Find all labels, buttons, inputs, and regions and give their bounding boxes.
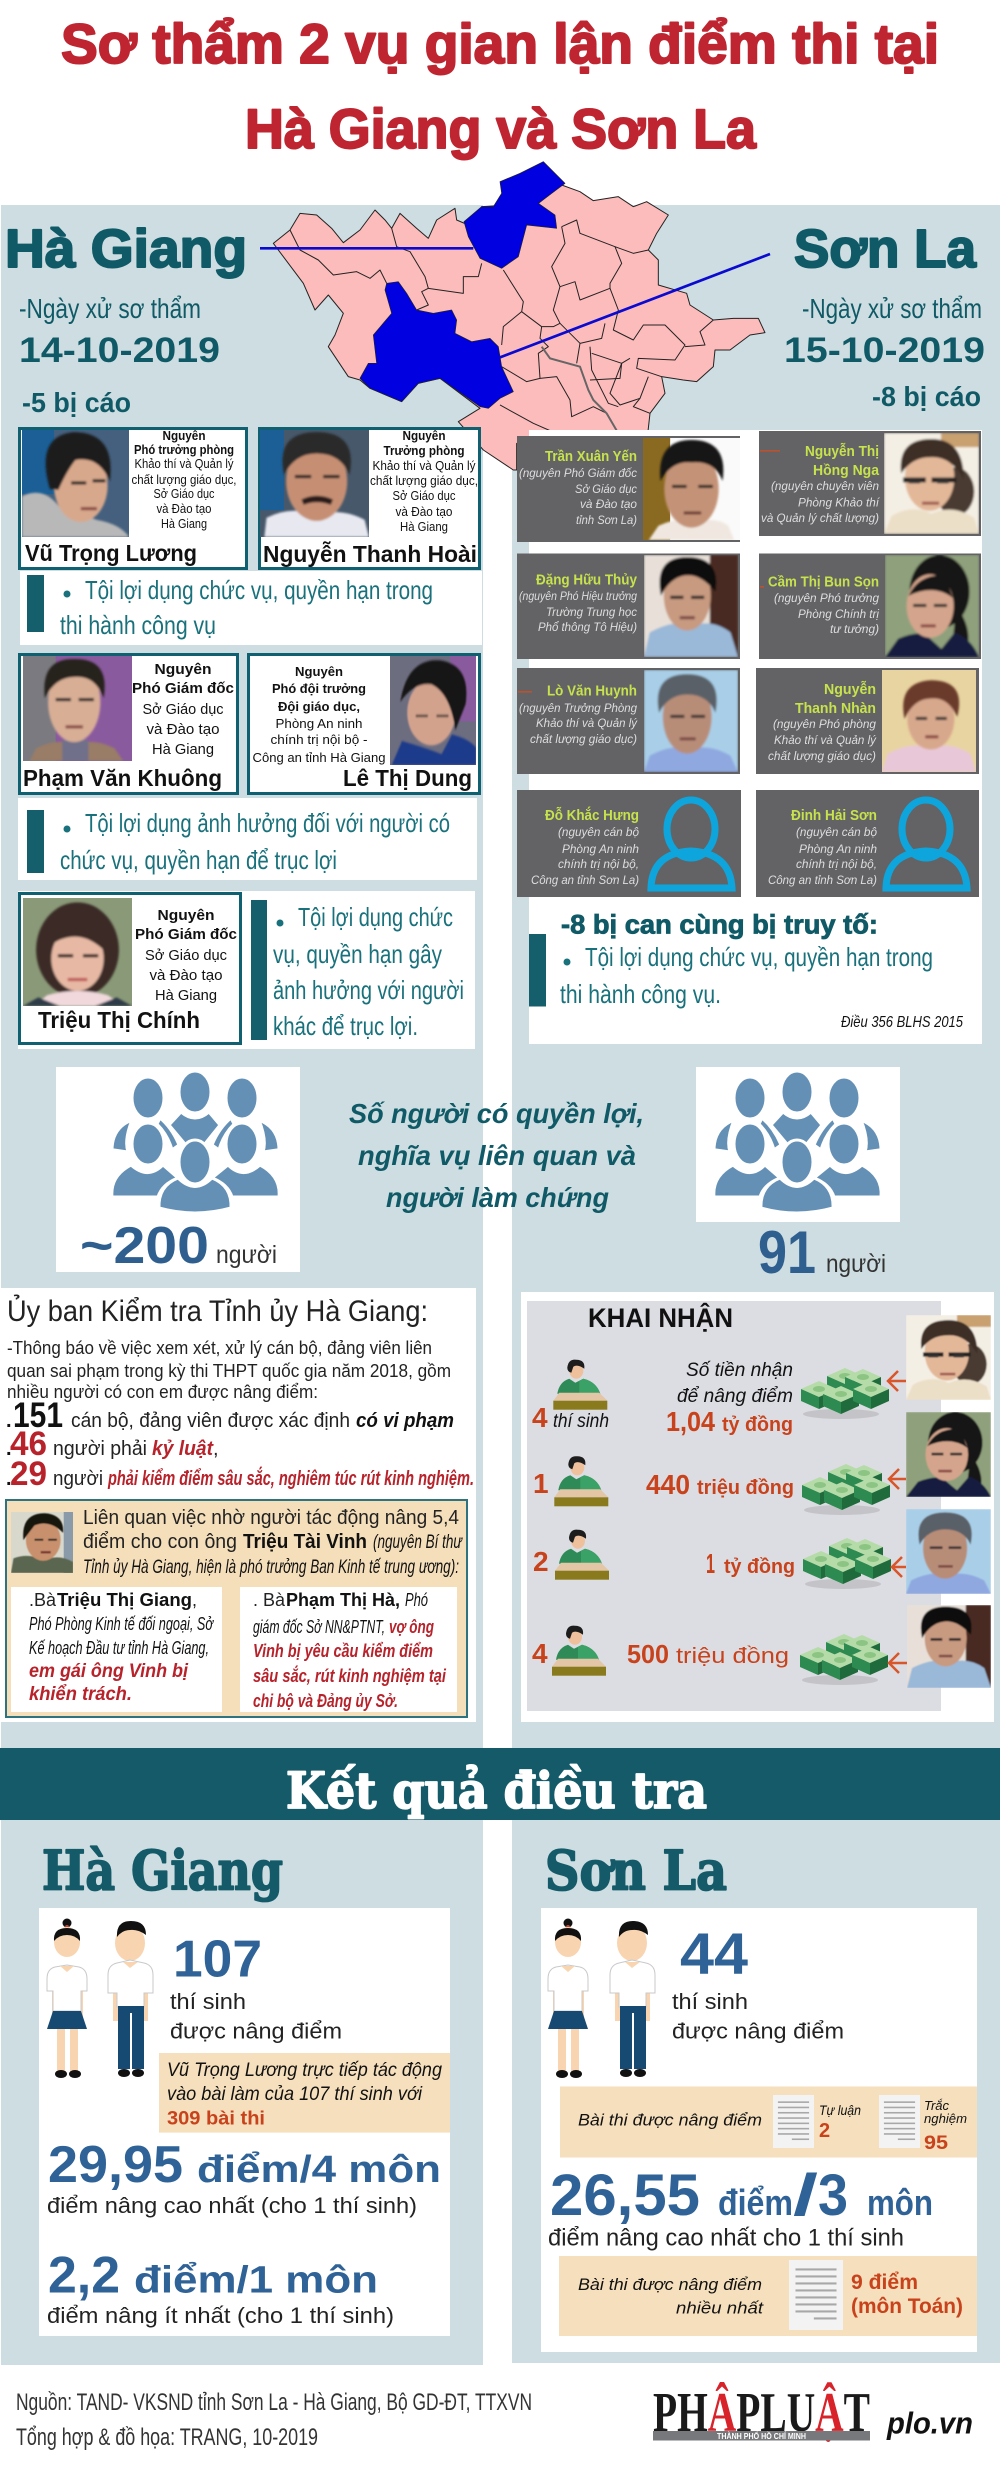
card: Trần Xuân Yến xyxy=(517,436,740,542)
logo: Pháp Luật TP.HCM and plo.vn: plo.vn xyxy=(886,2406,973,2440)
arrows from defendants to money xyxy=(888,1371,907,1673)
card: Đặng Hữu Thủy: (nguyên Phó Hiệu trưởng xyxy=(519,589,637,603)
card: Đặng Hữu Thủy: Trường Trung học xyxy=(546,605,637,619)
card: Nguyễn Thị Hồng Nga: Nguyễn Thị xyxy=(805,443,879,460)
stat: highest score increase: 3 xyxy=(818,2163,848,2228)
icon: group of people xyxy=(714,1071,881,1213)
photo: Trần Xuân Yến xyxy=(643,438,740,540)
card: Vũ Trọng Lương: Hà Giang xyxy=(161,517,207,531)
text block: charge against the 8 Sơn La defendants xyxy=(529,910,963,1031)
photo: Vũ Trọng Lương xyxy=(22,430,129,537)
text block: charge against the 8 Sơn La defendants: Điều 356 BLHS 2015 xyxy=(841,1014,963,1031)
card: Nguyễn Thanh Hoài xyxy=(260,428,480,568)
stat: 151 officials: cán bộ, đảng viên được xác định xyxy=(71,1410,350,1432)
heading: people with related rights and witnesses: người làm chứng xyxy=(386,1182,609,1213)
stat: highest score increase: môn xyxy=(867,2182,933,2223)
card: Nguyễn Thanh Nhàn: Thanh Nhàn xyxy=(795,701,876,717)
photo: Cầm Thị Bun Sọn xyxy=(906,1412,991,1497)
stat: lowest score increase xyxy=(47,2246,394,2328)
heading: Hà Giang, trial date and defendants: -5 bị cáo xyxy=(22,387,131,418)
stat: highest score increase: điểm nâng cao nhất (cho 1 thí sinh) xyxy=(47,2193,417,2218)
callout: upgraded papers: 95 xyxy=(924,2133,948,2154)
card: Triệu Thị Chính: Sở Giáo dục xyxy=(145,947,227,964)
card: Triệu Thị Chính: Nguyên xyxy=(158,907,214,924)
card: Lê Thị Dung: Đội giáo dục, xyxy=(278,699,360,714)
heading: Hà Giang, trial date and defendants: 14-10-2019 xyxy=(19,331,220,370)
card: Đặng Hữu Thủy: Phổ thông Tô Hiệu) xyxy=(538,620,637,634)
stat: 46 people disciplined: kỷ luật xyxy=(152,1438,214,1460)
heading: people with related rights and witnesses: Số người có quyền lợi, xyxy=(349,1098,644,1129)
text box: Triệu Thị Giang: Triệu Thị Giang xyxy=(57,1590,192,1610)
card: Triệu Thị Chính: Triệu Thị Chính xyxy=(38,1007,200,1033)
stat: about 200 people in Hà Giang xyxy=(56,1067,300,1275)
card: Lê Thị Dung: Công an tỉnh Hà Giang xyxy=(252,750,386,765)
stat: highest score increase xyxy=(548,2163,933,2252)
card: Đỗ Khắc Hưng: chính trị nội bộ, xyxy=(558,857,639,871)
card: Nguyễn Thanh Hoài: Nguyễn Thanh Hoài xyxy=(263,540,477,567)
text box: Phạm Thị Hà: chi bộ và Đảng ủy Sở. xyxy=(253,1691,398,1711)
logo: Pháp Luật TP.HCM and plo.vn: THÀNH PHỐ HỒ CHÍ MINH xyxy=(717,2431,806,2441)
card: Nguyễn Thanh Nhàn: Khảo thí và Quản lý xyxy=(774,733,877,747)
stat: lowest score increase: 2,2 xyxy=(48,2246,120,2304)
panel: Sơn La results: thí sinh xyxy=(672,1989,748,2014)
card: Phạm Văn Khuông: Nguyên xyxy=(154,661,212,678)
stat: 46 people disciplined: . xyxy=(6,1438,12,1460)
stat: highest score increase: 29,95 xyxy=(48,2136,183,2194)
callout: upgraded papers: Bài thi được nâng điểm xyxy=(578,2110,762,2130)
row: 2 students, 1 billion: 1 xyxy=(706,1548,715,1579)
card: Đinh Hải Sơn: Công an tỉnh Sơn La) xyxy=(768,873,877,887)
photo: Cầm Thị Bun Sọn xyxy=(885,555,979,657)
stat: 46 people disciplined: , xyxy=(213,1438,219,1460)
leader line: Sơn La xyxy=(500,254,770,357)
photo: Nguyễn Thị Hồng Nga xyxy=(884,433,979,534)
row: 2 students, 1 billion: tỷ đồng xyxy=(724,1556,795,1578)
text block: charge against the 8 Sơn La defendants: thi hành công vụ. xyxy=(560,979,721,1009)
card: Nguyễn Thanh Hoài: Trưởng phòng xyxy=(384,444,464,458)
heading: people with related rights and witnesses: nghĩa vụ liên quan và xyxy=(358,1140,636,1171)
heading: people with related rights and witnesses xyxy=(349,1098,644,1213)
panel: Ủy ban Kiểm tra Tỉnh ủy Hà Giang: quan sai phạm trong kỳ thi THPT quốc gia năm 2018, gồm xyxy=(7,1361,451,1381)
text box: Phạm Thị Hà: Vinh bị yêu cầu kiểm điểm xyxy=(253,1641,433,1661)
text block: charge 3 xyxy=(18,891,475,1049)
row: 4 students, 1.04 billion: 1,04 xyxy=(666,1406,715,1437)
text block: charge against the 8 Sơn La defendants: -8 bị can cùng bị truy tố: xyxy=(561,910,878,940)
photo: Lê Thị Dung xyxy=(390,656,476,765)
photo: Nguyễn Thị Hồng Nga xyxy=(906,1315,991,1400)
heading: Hà Giang, trial date and defendants xyxy=(5,219,247,418)
province: Hà Giang highlighted xyxy=(464,162,565,268)
panel: Hà Giang results: Hà Giang xyxy=(42,1838,283,1902)
card: Lò Văn Huynh: (nguyên Trưởng Phòng xyxy=(519,701,637,715)
card: Nguyễn Thanh Hoài: chất lượng giáo dục, xyxy=(370,474,478,488)
text block: charge 1 xyxy=(20,571,482,645)
card: Nguyễn Thanh Nhàn: chất lượng giáo dục) xyxy=(768,749,876,763)
icon: document xyxy=(789,2260,843,2330)
photo: Đặng Hữu Thủy xyxy=(907,1605,991,1688)
card: Vũ Trọng Lương: Nguyên xyxy=(162,429,206,443)
panel: Hà Giang results: 107 xyxy=(173,1930,262,1988)
stat: highest score increase: điểm nâng cao nhất cho 1 thí sinh xyxy=(548,2224,904,2252)
card: Phạm Văn Khuông: Phạm Văn Khuông xyxy=(23,765,222,791)
icon: person placeholder xyxy=(886,800,967,888)
stat: 46 people disciplined: 46 xyxy=(10,1425,47,1463)
card: Cầm Thị Bun Sọn: tư tưởng) xyxy=(830,622,879,636)
card: Nguyễn Thị Hồng Nga xyxy=(759,431,981,536)
card: Phạm Văn Khuông: Hà Giang xyxy=(152,741,214,758)
photo: Triệu Thị Chính xyxy=(23,898,132,1006)
card: Vũ Trọng Lương: chất lượng giáo dục, xyxy=(132,473,236,487)
stat: 151 officials: có vi phạm xyxy=(356,1410,454,1432)
source credits: Nguồn: TAND- VKSND tỉnh Sơn La - Hà Giang, Bộ GD-ĐT, TTXVN xyxy=(16,2389,532,2416)
card: Nguyễn Thị Hồng Nga: và Quản lý chất lượng) xyxy=(761,511,879,525)
card: Đinh Hải Sơn: Đinh Hải Sơn xyxy=(791,808,877,824)
panel: Hà Giang results xyxy=(39,1838,450,2336)
callout: most upgraded paper xyxy=(559,2256,977,2336)
photo: Nguyễn Thanh Nhàn xyxy=(882,670,976,772)
stat: 29 people self-critique: 29 xyxy=(10,1455,47,1493)
card: Đặng Hữu Thủy: Đặng Hữu Thủy xyxy=(536,572,637,588)
text box: Phạm Thị Hà: vợ ông xyxy=(389,1617,434,1637)
card: Lò Văn Huynh: Lò Văn Huynh xyxy=(547,684,637,700)
row: 1 student, 440 million: triệu đồng xyxy=(697,1477,794,1499)
card: Vũ Trọng Lương: và Đào tạo xyxy=(156,502,212,516)
text block: charge 2: Tội lợi dụng ảnh hưởng đối với người có xyxy=(85,808,450,838)
card: Nguyễn Thanh Nhàn: Nguyễn xyxy=(824,681,876,698)
source credits xyxy=(16,2389,532,2451)
panel: Hà Giang results: thí sinh xyxy=(170,1989,246,2014)
text block: charge 2: chức vụ, quyền hạn để trục lợi xyxy=(60,845,337,875)
callout: most upgraded paper: 9 điểm xyxy=(851,2271,918,2294)
callout: Triệu Tài Vinh: điểm cho con ông xyxy=(83,1531,237,1553)
panel: Khai nhận (confessions) xyxy=(521,1292,994,1722)
icon: group of people xyxy=(112,1071,279,1213)
card: Lê Thị Dung: Phòng An ninh xyxy=(276,716,362,731)
logo: Pháp Luật TP.HCM and plo.vn: PHÂPLUẬT xyxy=(653,2381,870,2444)
callout: Triệu Tài Vinh: Tỉnh ủy Hà Giang, hiện là phó trưởng Ban Kinh tế trung ương): xyxy=(83,1557,459,1578)
source credits: Tổng hợp & đồ họa: TRANG, 10-2019 xyxy=(16,2424,318,2451)
callout: most upgraded paper: (môn Toán) xyxy=(851,2295,963,2318)
text box: Triệu Thị Giang: khiển trách. xyxy=(29,1684,132,1705)
text block: charge 1: thi hành công vụ xyxy=(60,610,216,640)
text box: Phạm Thị Hà: sâu sắc, rút kinh nghiệm tại xyxy=(253,1665,447,1686)
row: 4 students, 1.04 billion: thí sinh xyxy=(553,1411,609,1432)
callout: upgraded papers: nghiệm xyxy=(924,2111,967,2126)
stat: 46 people disciplined xyxy=(6,1425,219,1463)
text box: Triệu Thị Giang: Kế hoạch Đầu tư tỉnh Hà Giang, xyxy=(29,1638,209,1658)
text box: Phạm Thị Hà: giám đốc Sở NN&PTNT, xyxy=(253,1617,385,1637)
card: Nguyễn Thị Hồng Nga: Hồng Nga xyxy=(813,463,880,479)
card: Lê Thị Dung: chính trị nội bộ - xyxy=(270,732,368,747)
text block: charge 3: ảnh hưởng với người xyxy=(273,975,464,1005)
text box: Triệu Thị Giang: , xyxy=(192,1590,197,1610)
card: Trần Xuân Yến: Sở Giáo dục xyxy=(575,482,637,496)
callout: upgraded papers: Trắc xyxy=(924,2098,950,2113)
card: Lò Văn Huynh: Khảo thí và Quản lý xyxy=(536,716,638,730)
row: 1 student, 440 million: 440 xyxy=(646,1469,690,1500)
card: Cầm Thị Bun Sọn xyxy=(759,554,981,659)
card: Lò Văn Huynh xyxy=(517,668,740,774)
stat: 151 officials xyxy=(6,1396,454,1435)
row: 4 students, 1.04 billion: 4 xyxy=(532,1402,548,1433)
text block: charge 3: Tội lợi dụng chức xyxy=(298,902,453,932)
stat: about 200 people in Hà Giang: ~200 xyxy=(80,1217,209,1275)
card: Lê Thị Dung: Lê Thị Dung xyxy=(343,765,472,791)
row: 4 students, 500 million: 4 xyxy=(532,1638,548,1669)
callout: 309 papers: vào bài làm của 107 thí sinh với xyxy=(167,2084,423,2105)
stat: 91 people in Sơn La: 91 xyxy=(758,1219,816,1286)
panel: Ủy ban Kiểm tra Tỉnh ủy Hà Giang: Ủy ban Kiểm tra Tỉnh ủy Hà Giang: xyxy=(7,1294,428,1328)
icon: girl student xyxy=(47,1918,87,2078)
photo: Triệu Tài Vinh xyxy=(11,1512,73,1573)
panel: Khai nhận (confessions): KHAI NHẬN xyxy=(588,1302,733,1333)
title xyxy=(61,12,939,160)
province: Sơn La highlighted xyxy=(360,282,513,408)
panel: Hà Giang results background xyxy=(1,1820,483,2365)
card: Phạm Văn Khuông: và Đào tạo xyxy=(146,721,220,738)
text box: Triệu Thị Giang: em gái ông Vinh bị xyxy=(29,1661,189,1682)
card: Nguyễn Thanh Hoài: và Đào tạo xyxy=(396,505,453,519)
card: Phạm Văn Khuông: Phó Giám đốc xyxy=(132,680,234,697)
row: 4 students, 1.04 billion: để nâng điểm xyxy=(677,1386,793,1407)
stat: highest score increase: 26,55 xyxy=(550,2163,700,2228)
card: Đinh Hải Sơn: chính trị nội bộ, xyxy=(796,857,877,871)
card: Vũ Trọng Lương xyxy=(20,428,246,568)
text box: Triệu Thị Giang: .Bà xyxy=(29,1590,57,1610)
card: Đỗ Khắc Hưng: Đỗ Khắc Hưng xyxy=(545,806,639,824)
callout: 309 papers xyxy=(159,2053,450,2133)
icon: girl student xyxy=(548,1918,588,2078)
panel: Ủy ban Kiểm tra Tỉnh ủy Hà Giang: -Thông báo về việc xem xét, xử lý cán bộ, đảng viên liên xyxy=(7,1338,432,1358)
title: Hà Giang và Sơn La xyxy=(245,97,757,160)
text box: Phạm Thị Hà: Phó xyxy=(405,1590,428,1610)
card: Đỗ Khắc Hưng xyxy=(517,790,741,897)
text block: charge 3: khác để trục lợi. xyxy=(273,1011,418,1041)
stat: 29 people self-critique: . xyxy=(6,1468,12,1490)
card: Nguyễn Thị Hồng Nga: (nguyên chuyên viên xyxy=(771,479,879,493)
text box: Triệu Thị Giang xyxy=(11,1587,222,1712)
card: Phạm Văn Khuông xyxy=(20,654,238,794)
stat: highest score increase: / xyxy=(793,2163,818,2228)
heading: Sơn La, trial date and defendants xyxy=(784,219,985,412)
callout: Triệu Tài Vinh xyxy=(6,1500,467,1717)
text box: Triệu Thị Giang: Phó Phòng Kinh tế đối ngoại, Sở xyxy=(29,1614,214,1634)
card: Nguyễn Thanh Hoài: Hà Giang xyxy=(400,520,448,534)
card: Trần Xuân Yến: tỉnh Sơn La) xyxy=(576,513,637,527)
card: Cầm Thị Bun Sọn: (nguyên Phó trưởng xyxy=(774,591,879,605)
callout: upgraded papers: Tự luận xyxy=(819,2102,861,2118)
row: 1 student, 440 million xyxy=(533,1456,890,1515)
text block: charge 3: vụ, quyền hạn gây xyxy=(273,939,442,969)
card: Đinh Hải Sơn xyxy=(756,790,979,897)
row: 4 students, 500 million: 500 xyxy=(627,1639,669,1669)
row: 4 students, 500 million xyxy=(532,1626,888,1685)
stat: 29 people self-critique: phải kiểm điểm sâu sắc, nghiêm túc rút kinh nghiệm. xyxy=(107,1467,474,1490)
panel: Ủy ban Kiểm tra Tỉnh ủy Hà Giang: nhiều người có con em được nâng điểm: xyxy=(7,1382,318,1402)
title: Sơ thẩm 2 vụ gian lận điểm thi tại xyxy=(61,12,939,75)
callout: upgraded papers: 2 xyxy=(819,2120,830,2142)
card: Triệu Thị Chính: Phó Giám đốc xyxy=(135,926,237,943)
stat: lowest score increase: điểm/1 môn xyxy=(134,2260,378,2302)
card: Nguyễn Thanh Nhàn xyxy=(756,668,979,774)
card: Vũ Trọng Lương: Khảo thí và Quản lý xyxy=(134,457,234,471)
photo: Lò Văn Huynh xyxy=(644,670,738,772)
heading: Sơn La, trial date and defendants: Sơn La xyxy=(794,219,977,279)
heading: Hà Giang, trial date and defendants: Hà Giang xyxy=(5,219,247,279)
card: Đinh Hải Sơn: (nguyên cán bộ xyxy=(796,825,877,839)
panel: Sơn La defendants white backing xyxy=(529,430,982,1044)
card: Trần Xuân Yến: và Đào tạo xyxy=(580,497,637,511)
text block: charge 1: Tội lợi dụng chức vụ, quyền hạn trong xyxy=(85,575,433,605)
heading: Sơn La, trial date and defendants: -8 bị cáo xyxy=(872,381,981,412)
row: 4 students, 1.04 billion: tỷ đồng xyxy=(722,1414,793,1436)
stat: highest score increase: điểm/4 môn xyxy=(197,2149,441,2191)
stat: 91 people in Sơn La xyxy=(696,1067,900,1286)
stat: highest score increase xyxy=(47,2136,441,2218)
card: Lê Thị Dung xyxy=(248,654,480,794)
card: Lê Thị Dung: Phó đội trưởng xyxy=(272,681,366,696)
heading: Hà Giang, trial date and defendants: -Ngày xử sơ thẩm xyxy=(19,293,201,324)
card: Lò Văn Huynh: chất lượng giáo dục) xyxy=(530,732,637,746)
panel: Sơn La results xyxy=(541,1838,977,2352)
card: Đỗ Khắc Hưng: (nguyên cán bộ xyxy=(558,825,639,839)
callout: most upgraded paper: Bài thi được nâng điểm xyxy=(578,2275,762,2294)
stat: 29 people self-critique xyxy=(6,1455,474,1493)
card: Đinh Hải Sơn: Phòng An ninh xyxy=(799,842,877,856)
section banner: Kết quả điều tra: Kết quả điều tra xyxy=(286,1761,707,1820)
stat: 29 people self-critique: người xyxy=(53,1468,103,1490)
card: Nguyễn Thanh Hoài: Nguyên xyxy=(402,429,446,443)
panel: Hà Giang background xyxy=(1,205,483,1748)
stat: about 200 people in Hà Giang: người xyxy=(216,1241,277,1269)
row: 2 students, 1 billion xyxy=(533,1530,891,1589)
photo: Lò Văn Huynh xyxy=(906,1509,991,1594)
callout: Triệu Tài Vinh: Triệu Tài Vinh xyxy=(243,1531,367,1553)
callout: 309 papers: 309 bài thi xyxy=(167,2109,265,2130)
card: Vũ Trọng Lương: Phó trưởng phòng xyxy=(134,443,234,457)
photo: Phạm Văn Khuông xyxy=(23,656,132,761)
stat: 46 people disciplined: người phải xyxy=(53,1438,147,1460)
card: Triệu Thị Chính: Hà Giang xyxy=(155,987,217,1004)
text box: Phạm Thị Hà: Phạm Thị Hà, xyxy=(286,1590,400,1610)
row: 2 students, 1 billion: 2 xyxy=(533,1546,549,1577)
stat: 151 officials: . xyxy=(6,1410,12,1432)
section banner: Kết quả điều tra xyxy=(0,1748,1000,1820)
card: Đỗ Khắc Hưng: Công an tỉnh Sơn La) xyxy=(531,873,639,887)
panel: Ủy ban Kiểm tra Tỉnh ủy Hà Giang xyxy=(1,1288,476,1722)
card: Nguyễn Thanh Hoài: Khảo thí và Quản lý xyxy=(372,459,476,473)
icon: document xyxy=(773,2095,814,2148)
callout: Triệu Tài Vinh: (nguyên Bí thư xyxy=(373,1532,463,1553)
card: Nguyễn Thanh Nhàn: (nguyên Phó phòng xyxy=(773,717,876,731)
stat: highest score increase: điểm xyxy=(718,2182,793,2223)
heading: Sơn La, trial date and defendants: 15-10-2019 xyxy=(784,331,985,370)
icon: person placeholder xyxy=(651,800,732,888)
panel: Hà Giang results: được nâng điểm xyxy=(170,2018,342,2044)
panel: Sơn La results background xyxy=(512,1820,1000,2363)
card: Cầm Thị Bun Sọn: Phòng Chính trị xyxy=(798,607,879,621)
panel: Sơn La results: 44 xyxy=(680,1922,748,1987)
row: 4 students, 500 million: triệu đồng xyxy=(676,1643,789,1668)
map of northern Vietnam with the two provinces highlighted xyxy=(260,162,770,470)
text box: Phạm Thị Hà: . Bà xyxy=(253,1590,286,1610)
card: Trần Xuân Yến: (nguyên Phó Giám đốc xyxy=(519,466,637,480)
card: Vũ Trọng Lương: Sở Giáo dục xyxy=(154,487,214,501)
panel: Sơn La results: Sơn La xyxy=(545,1838,727,1902)
panel: Sơn La background xyxy=(512,205,1000,1748)
card: Trần Xuân Yến: Trần Xuân Yến xyxy=(545,449,637,465)
card: Nguyễn Thanh Hoài: Sở Giáo dục xyxy=(392,489,456,503)
icon: boy student xyxy=(108,1921,153,2077)
text box: Phạm Thị Hà xyxy=(240,1587,457,1712)
callout: 309 papers: Vũ Trọng Lương trực tiếp tác động xyxy=(167,2060,442,2081)
panel: Sơn La results: được nâng điểm xyxy=(672,2018,844,2044)
row: 1 student, 440 million: 1 xyxy=(533,1468,549,1499)
card: Lê Thị Dung: Nguyên xyxy=(295,664,343,679)
stat: 91 people in Sơn La: người xyxy=(826,1250,886,1278)
icon: boy student xyxy=(610,1921,655,2077)
icon: document xyxy=(879,2095,920,2148)
callout: Triệu Tài Vinh: Liên quan việc nhờ người tác động nâng 5,4 xyxy=(83,1507,459,1529)
stat: 151 officials: 151 xyxy=(13,1396,63,1435)
leader line: Hà Giang xyxy=(260,244,473,252)
card: Đặng Hữu Thủy xyxy=(517,554,740,659)
text block: charge 2 xyxy=(18,798,477,880)
photo: Nguyễn Thanh Hoài xyxy=(260,430,369,537)
card: Nguyễn Thị Hồng Nga: Phòng Khảo thí xyxy=(798,496,881,510)
card: Cầm Thị Bun Sọn: Cầm Thị Bun Sọn xyxy=(768,574,879,590)
card: Triệu Thị Chính: và Đào tạo xyxy=(150,967,222,984)
photo: Đặng Hữu Thủy xyxy=(644,555,738,657)
card: Vũ Trọng Lương: Vũ Trọng Lương xyxy=(25,540,197,566)
callout: most upgraded paper: nhiều nhất xyxy=(676,2299,764,2318)
card: Đỗ Khắc Hưng: Phòng An ninh xyxy=(562,842,639,856)
row: 4 students, 1.04 billion: Số tiền nhận xyxy=(686,1360,793,1381)
row: 4 students, 1.04 billion xyxy=(532,1360,889,1437)
card: Phạm Văn Khuông: Sở Giáo dục xyxy=(142,701,224,718)
callout: upgraded papers xyxy=(560,2086,977,2158)
stat: lowest score increase: điểm nâng ít nhất (cho 1 thí sinh) xyxy=(47,2303,394,2328)
card: Triệu Thị Chính xyxy=(20,894,240,1044)
